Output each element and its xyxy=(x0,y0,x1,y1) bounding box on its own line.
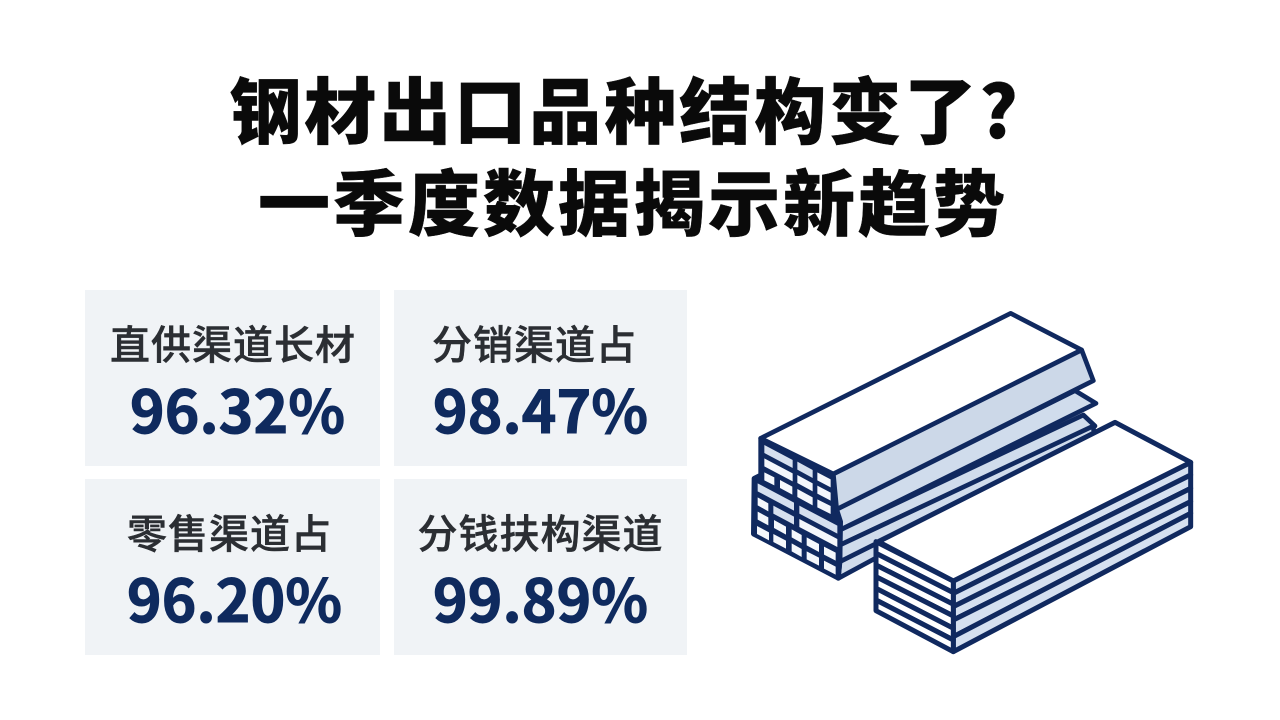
panel: distribution structure channel xyxy=(394,479,687,655)
icon: stacked steel bars and plates xyxy=(751,311,1194,654)
plate long sides xyxy=(953,462,1191,652)
value: 98.47% xyxy=(433,365,648,450)
panel: distribution share xyxy=(394,290,687,466)
left stack top face xyxy=(761,313,1082,474)
value: 96.32% xyxy=(130,365,345,450)
label: 直供渠道长材 xyxy=(110,313,356,371)
right stack of plates xyxy=(876,422,1191,652)
value: 99.89% xyxy=(433,554,648,639)
label: 分销渠道占 xyxy=(432,313,637,371)
left stack bar ends xyxy=(757,445,837,575)
plate end stripes xyxy=(876,542,953,652)
label: 零售渠道占 xyxy=(127,502,332,560)
left stack end face backing xyxy=(753,438,841,578)
left stack bevel side xyxy=(833,350,1093,509)
title line 1: 钢材出口品种结构变了? xyxy=(229,54,1021,159)
label: 分钱扶构渠道 xyxy=(418,502,664,560)
plate top face xyxy=(878,422,1191,581)
title line 2: 一季度数据揭示新趋势 xyxy=(258,146,1008,251)
title xyxy=(229,54,1021,251)
left stack long sides xyxy=(837,391,1096,578)
panel: retail share xyxy=(85,479,380,655)
panel: direct supply long products xyxy=(85,290,380,466)
value: 96.20% xyxy=(127,554,342,639)
